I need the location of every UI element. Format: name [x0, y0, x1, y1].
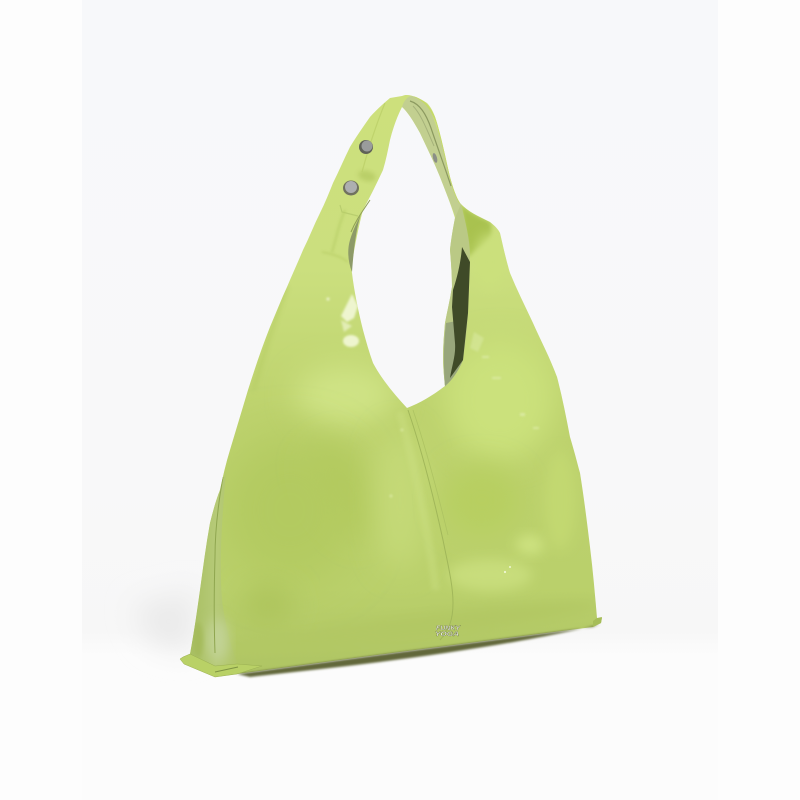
glossy crackle patches: [326, 294, 359, 347]
inner lining through the opening: [348, 200, 470, 387]
left gusset: [190, 475, 230, 666]
strap stitching and creases: [340, 205, 358, 216]
inner strap rivet: [432, 153, 438, 163]
brand logo: FUNKY: [436, 625, 461, 632]
product photo: green hobo bag: [129, 95, 602, 679]
bottom fold: left corner: [180, 654, 262, 677]
left gusset seam: [214, 477, 223, 653]
strap rivet: upper: [359, 140, 373, 154]
leather shading and highlights: [190, 96, 600, 672]
brand logo: [435, 625, 461, 638]
bag body: [180, 95, 602, 676]
cast shadow on left floor: [133, 590, 195, 655]
strap rivet: lower: [343, 180, 359, 196]
bottom shadow under bag: [237, 624, 600, 677]
underside of strap, paler lining: [402, 96, 461, 218]
brand logo: YOGA: [435, 631, 459, 638]
centre seam: [408, 410, 453, 640]
bottom fold: right corner: [593, 617, 602, 627]
dark fold behind right shoulder: [460, 203, 492, 256]
